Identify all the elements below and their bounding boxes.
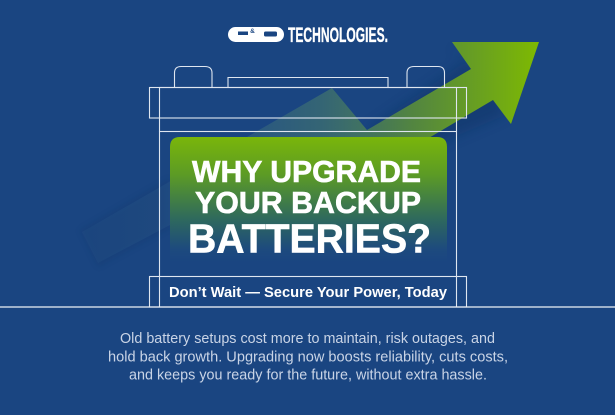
battery base [150,276,466,307]
battery body [160,88,456,132]
description line 2: hold back growth. Upgrading now boosts reliability, cuts costs, [108,350,508,366]
title line 1: WHY UPGRADE [192,155,421,189]
logo [228,24,388,47]
battery outline [150,66,466,307]
description [108,331,508,384]
description line 1: Old battery setups cost more to maintain, risk outages, and [120,331,495,347]
ground line [0,306,615,308]
logo mark C&D: & [250,28,255,35]
green title panel [170,137,447,262]
logo mark C&D [228,27,284,42]
title line 3: BATTERIES? [188,216,431,262]
arrow tail shadow [80,178,170,267]
battery lid [150,88,466,118]
subtitle: Don’t Wait — Secure Your Power, Today [169,284,448,301]
right terminal [407,66,444,87]
rising arrow [82,42,539,263]
description line 3: and keeps you ready for the future, without extra hassle. [129,368,487,384]
title [188,155,431,262]
arrow head shadow [367,45,505,160]
left terminal [174,66,212,87]
logo wordmark: TECHNOLOGIES. [288,24,388,47]
centre cap [228,78,388,87]
title line 2: YOUR BACKUP [195,186,421,220]
